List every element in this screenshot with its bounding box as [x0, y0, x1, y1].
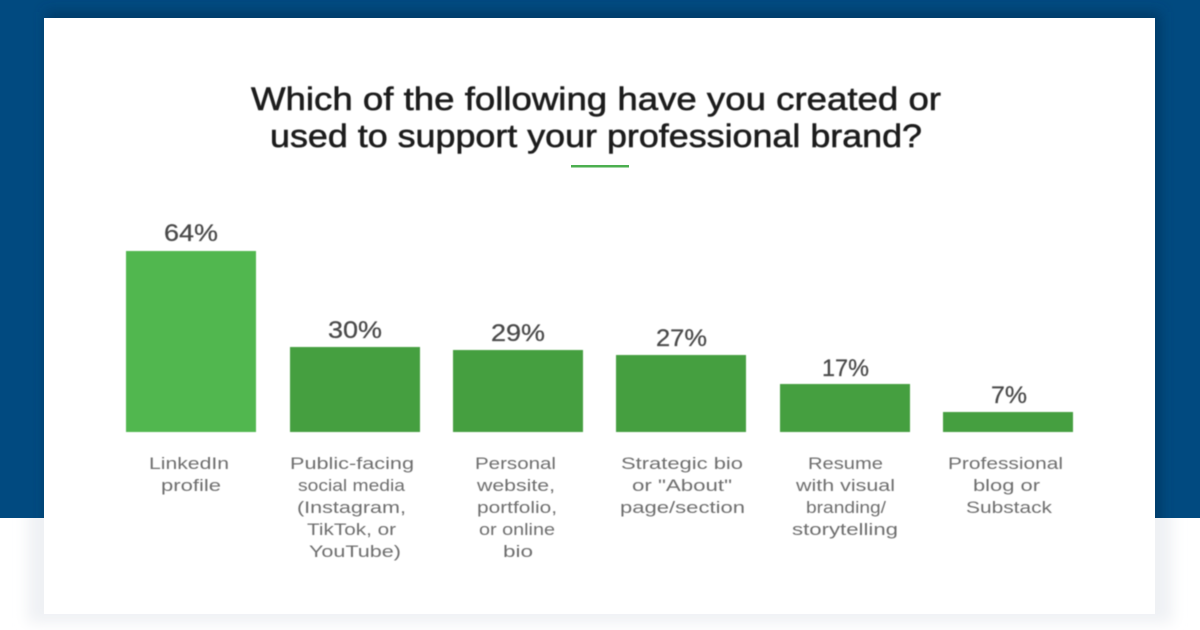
bar: public-facing social media: 30% [328, 317, 382, 344]
bar: personal website: Personal [475, 454, 556, 473]
bar: resume with visual branding: storytelling [792, 520, 898, 539]
bar: professional blog: Professional [948, 454, 1063, 473]
bar: public-facing social media: Public-facing [290, 454, 414, 473]
bar: personal website [453, 320, 583, 561]
bar: public-facing social media: TikTok, or [307, 520, 396, 539]
bar: resume with visual branding: with visual [795, 476, 895, 495]
bar: public-facing social media: YouTube) [309, 542, 401, 561]
title accent rule [571, 165, 629, 168]
bar: strategic bio: page/section [620, 498, 745, 517]
title [251, 81, 941, 154]
bar: LinkedIn profile [126, 220, 256, 495]
bar: personal website: portfolio, [477, 498, 557, 517]
bar: strategic bio: Strategic bio [621, 454, 743, 473]
card shadow on blue band [46, 12, 1161, 532]
bar: LinkedIn profile: profile [161, 476, 221, 495]
bar: personal website: 29% [491, 320, 545, 347]
card shadow on white area [28, 518, 1172, 622]
bar: public-facing social media: social media [298, 476, 406, 495]
bar: professional blog: 7% [991, 382, 1027, 409]
bar: strategic bio: 27% [656, 325, 707, 352]
bar: resume with visual branding [780, 355, 910, 539]
bar: personal website: bio [503, 542, 533, 561]
title: used to support your professional brand? [270, 118, 922, 154]
bar: professional blog: Substack [966, 498, 1053, 517]
bar: professional blog [943, 382, 1073, 517]
bar: public-facing social media [290, 317, 420, 561]
bar chart [126, 220, 1073, 561]
bar: personal website: or online [479, 520, 555, 539]
bar: LinkedIn profile: LinkedIn [149, 454, 229, 473]
bar: personal website: website, [476, 476, 555, 495]
bar: public-facing social media: (Instagram, [297, 498, 406, 517]
bar: resume with visual branding: branding/ [806, 498, 886, 517]
bar: LinkedIn profile: 64% [164, 220, 218, 247]
bar: resume with visual branding: Resume [808, 454, 883, 473]
bar: strategic bio [616, 325, 746, 517]
bar: resume with visual branding: 17% [822, 355, 869, 382]
title: Which of the following have you created or [251, 81, 941, 117]
bar: strategic bio: or "About" [632, 476, 732, 495]
bar: professional blog: blog or [973, 476, 1040, 495]
